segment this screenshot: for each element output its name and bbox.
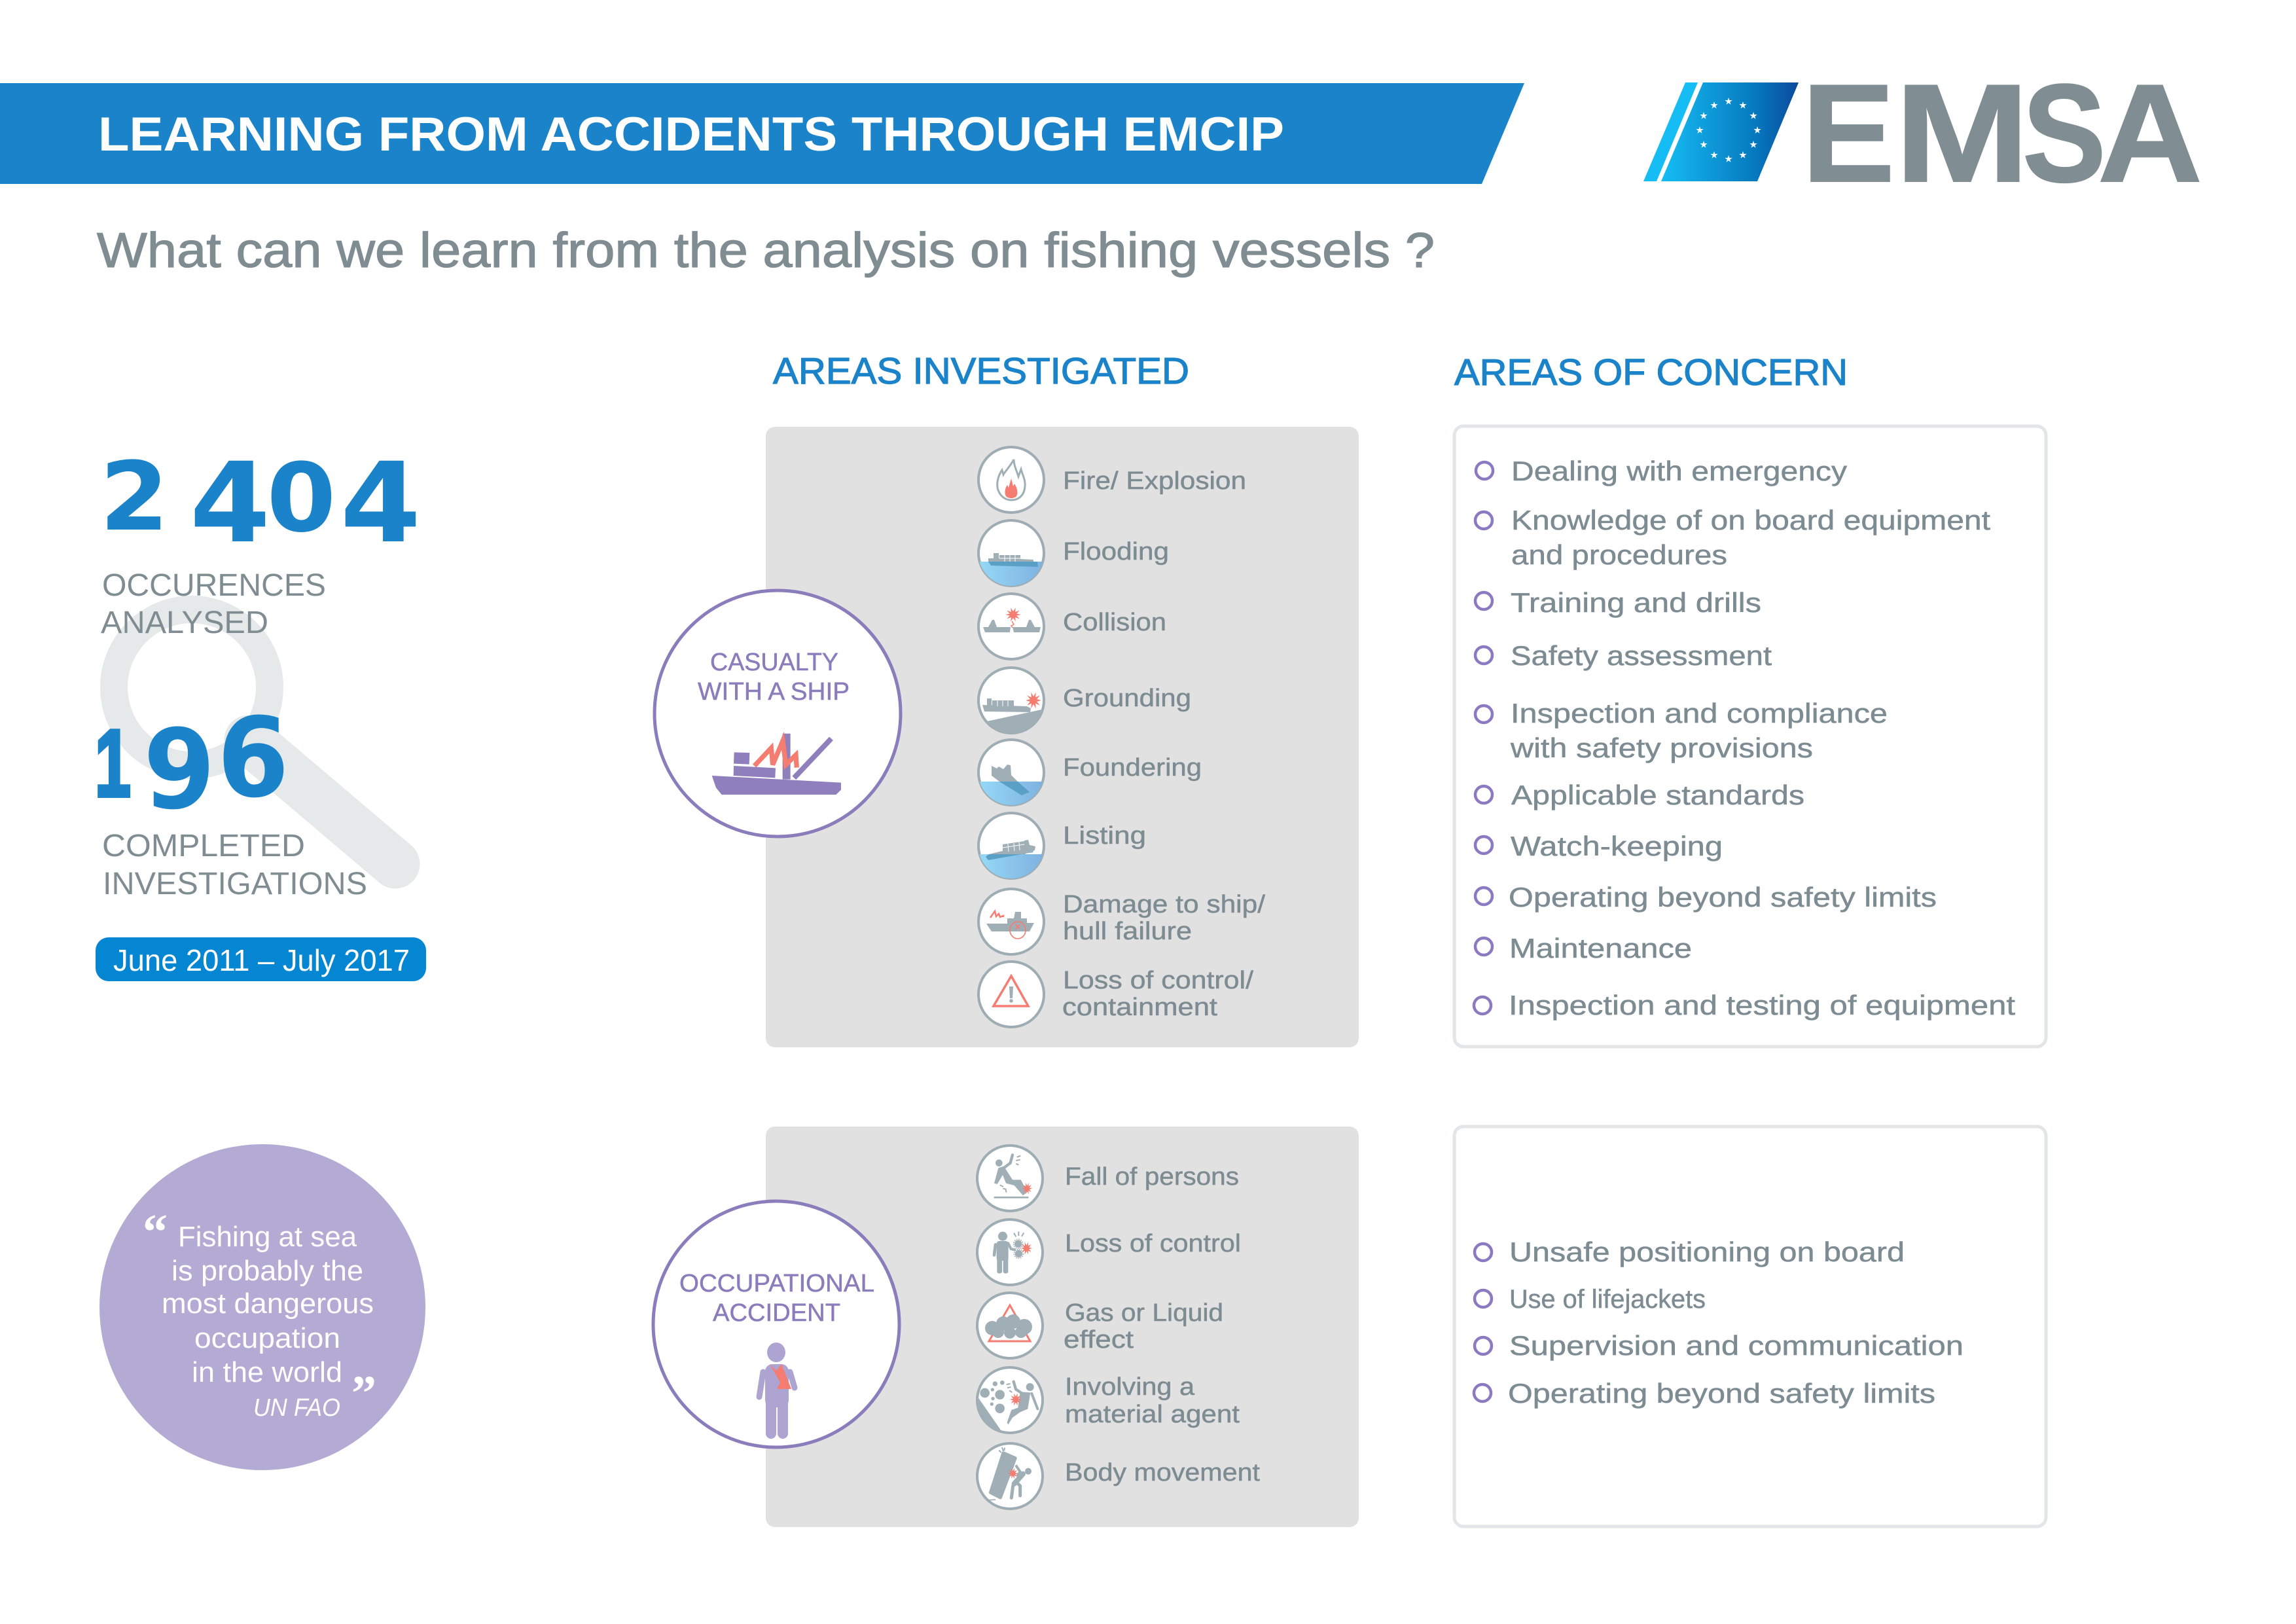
label: grounding: Grounding — [1063, 685, 1191, 712]
concern list — [1509, 456, 2015, 1020]
concern list occupational — [1508, 1236, 1964, 1409]
icon: damage to ship — [978, 889, 1044, 954]
quote text: is probably the — [171, 1255, 363, 1287]
icon: body movement — [977, 1443, 1043, 1509]
icon: fire — [978, 447, 1044, 513]
concern list: Watch-keeping — [1511, 831, 1723, 861]
icon: loss of control warning — [978, 962, 1044, 1027]
label completed: COMPLETED — [102, 829, 305, 863]
label: collision: Collision — [1063, 609, 1166, 636]
label: flooding: Flooding — [1063, 538, 1169, 566]
opening quote mark: “ — [143, 1204, 168, 1259]
label investigations: INVESTIGATIONS — [103, 867, 367, 901]
icon: magnifying glass — [114, 609, 395, 864]
icon: fall of persons — [977, 1146, 1043, 1211]
label: foundering: Foundering — [1063, 754, 1202, 782]
EMSA logo: S — [2022, 56, 2106, 211]
quote text: occupation — [194, 1322, 340, 1354]
label: damage to ship — [1063, 891, 1265, 945]
label: gas or liquid: effect — [1064, 1326, 1134, 1354]
label: body movement: Body movement — [1065, 1459, 1260, 1487]
concern list occupational: Supervision and communication — [1509, 1330, 1964, 1361]
circle: occupational accident — [653, 1201, 899, 1447]
EMSA logo: A — [2098, 56, 2202, 211]
circle: occupational accident: ACCIDENT — [713, 1299, 840, 1327]
subtitle: What can we learn from the analysis on fishing vessels ? — [97, 223, 1435, 278]
concern list occupational: Unsafe positioning on board — [1509, 1236, 1905, 1267]
icon: foundering — [977, 740, 1045, 808]
concern list occupational: Operating beyond safety limits — [1508, 1378, 1935, 1409]
label: fall of persons: Fall of persons — [1065, 1163, 1239, 1191]
quote text — [162, 1221, 374, 1388]
label: material agent — [1065, 1373, 1240, 1428]
concern list: Inspection and compliance — [1511, 698, 1888, 729]
label: loss of control containment: Loss of control/ — [1063, 967, 1253, 994]
concern list: Knowledge of on board equipment — [1511, 505, 1990, 535]
label: gas or liquid — [1064, 1299, 1223, 1354]
number 196 — [95, 695, 289, 834]
quote text: in the world — [192, 1356, 342, 1388]
heading: areas of concern: AREAS OF CONCERN — [1454, 352, 1848, 393]
concern list: Maintenance — [1509, 933, 1692, 964]
icon: damage to ship: × — [1014, 922, 1021, 933]
icon: listing — [977, 813, 1045, 880]
quote text: most dangerous — [162, 1288, 374, 1320]
concern list occupational: Use of lifejackets — [1509, 1285, 1706, 1314]
number 2 404: 4 — [190, 439, 270, 568]
stat: occurrences — [99, 439, 421, 640]
concern list: Inspection and testing of equipment — [1509, 990, 2015, 1020]
quote circle — [99, 1144, 425, 1470]
concern list: and procedures — [1511, 539, 1727, 570]
icon: loss of control machinery — [977, 1219, 1043, 1285]
number 196: 9 — [143, 706, 215, 834]
label occurrences: OCCURENCES — [102, 568, 326, 603]
number 2 404: 4 — [340, 439, 421, 568]
concern list: Operating beyond safety limits — [1509, 882, 1937, 912]
label: damage to ship: Damage to ship/ — [1063, 891, 1265, 918]
number 2 404: 0 — [266, 443, 336, 554]
concern list: Applicable standards — [1511, 780, 1804, 810]
label: loss of control containment — [1062, 967, 1253, 1021]
title: LEARNING FROM ACCIDENTS THROUGH EMCIP — [98, 108, 1284, 161]
circle: casualty with a ship: WITH A SHIP — [698, 678, 850, 706]
quote source: UN FAO — [253, 1394, 340, 1422]
icon: flooding — [977, 520, 1045, 588]
label: material agent: material agent — [1065, 1401, 1240, 1428]
header banner — [0, 83, 1524, 184]
number 196: 6 — [217, 695, 289, 822]
panel: areas of concern casualty — [1454, 426, 2046, 1047]
label: listing: Listing — [1063, 822, 1146, 850]
icon: injured person — [759, 1343, 795, 1439]
date pill: June 2011 – July 2017 — [113, 943, 410, 977]
label: material agent: Involving a — [1065, 1373, 1195, 1401]
concern list: Dealing with emergency — [1511, 456, 1847, 486]
circle: casualty with a ship — [655, 590, 901, 837]
heading: areas investigated: AREAS INVESTIGATED — [773, 350, 1189, 392]
icon: material agent — [973, 1367, 1043, 1437]
EMSA logo: M — [1895, 55, 2030, 211]
panel: occupational areas investigated — [766, 1127, 1359, 1527]
circle: occupational accident: OCCUPATIONAL — [679, 1270, 874, 1297]
icon: gas or liquid — [977, 1293, 1043, 1358]
closing quote mark: ” — [351, 1366, 376, 1421]
circle: casualty with a ship: CASUALTY — [710, 649, 838, 676]
icon: ship — [712, 734, 841, 795]
label: gas or liquid: Gas or Liquid — [1065, 1299, 1223, 1327]
label: fire: Fire/ Explosion — [1063, 467, 1246, 495]
number 196: 1 — [95, 711, 131, 817]
panel: areas of concern occupational — [1454, 1127, 2046, 1526]
label: damage to ship: hull failure — [1063, 918, 1192, 945]
icon: collision — [978, 594, 1044, 659]
stat: investigations — [95, 695, 367, 901]
label: loss of control: Loss of control — [1065, 1230, 1241, 1257]
concern list: Safety assessment — [1511, 640, 1772, 671]
panel: casualty areas investigated — [766, 427, 1359, 1047]
number 2 404: 2 — [99, 442, 204, 552]
label analysed: ANALYSED — [101, 605, 268, 640]
quote text: Fishing at sea — [178, 1221, 357, 1253]
concern list: with safety provisions — [1510, 732, 1813, 763]
label: loss of control containment: containment — [1062, 994, 1218, 1021]
concern list: Training and drills — [1511, 587, 1761, 618]
EMSA logo — [1643, 55, 2202, 211]
EMSA logo: E — [1802, 56, 1895, 211]
icon: grounding — [978, 668, 1047, 736]
